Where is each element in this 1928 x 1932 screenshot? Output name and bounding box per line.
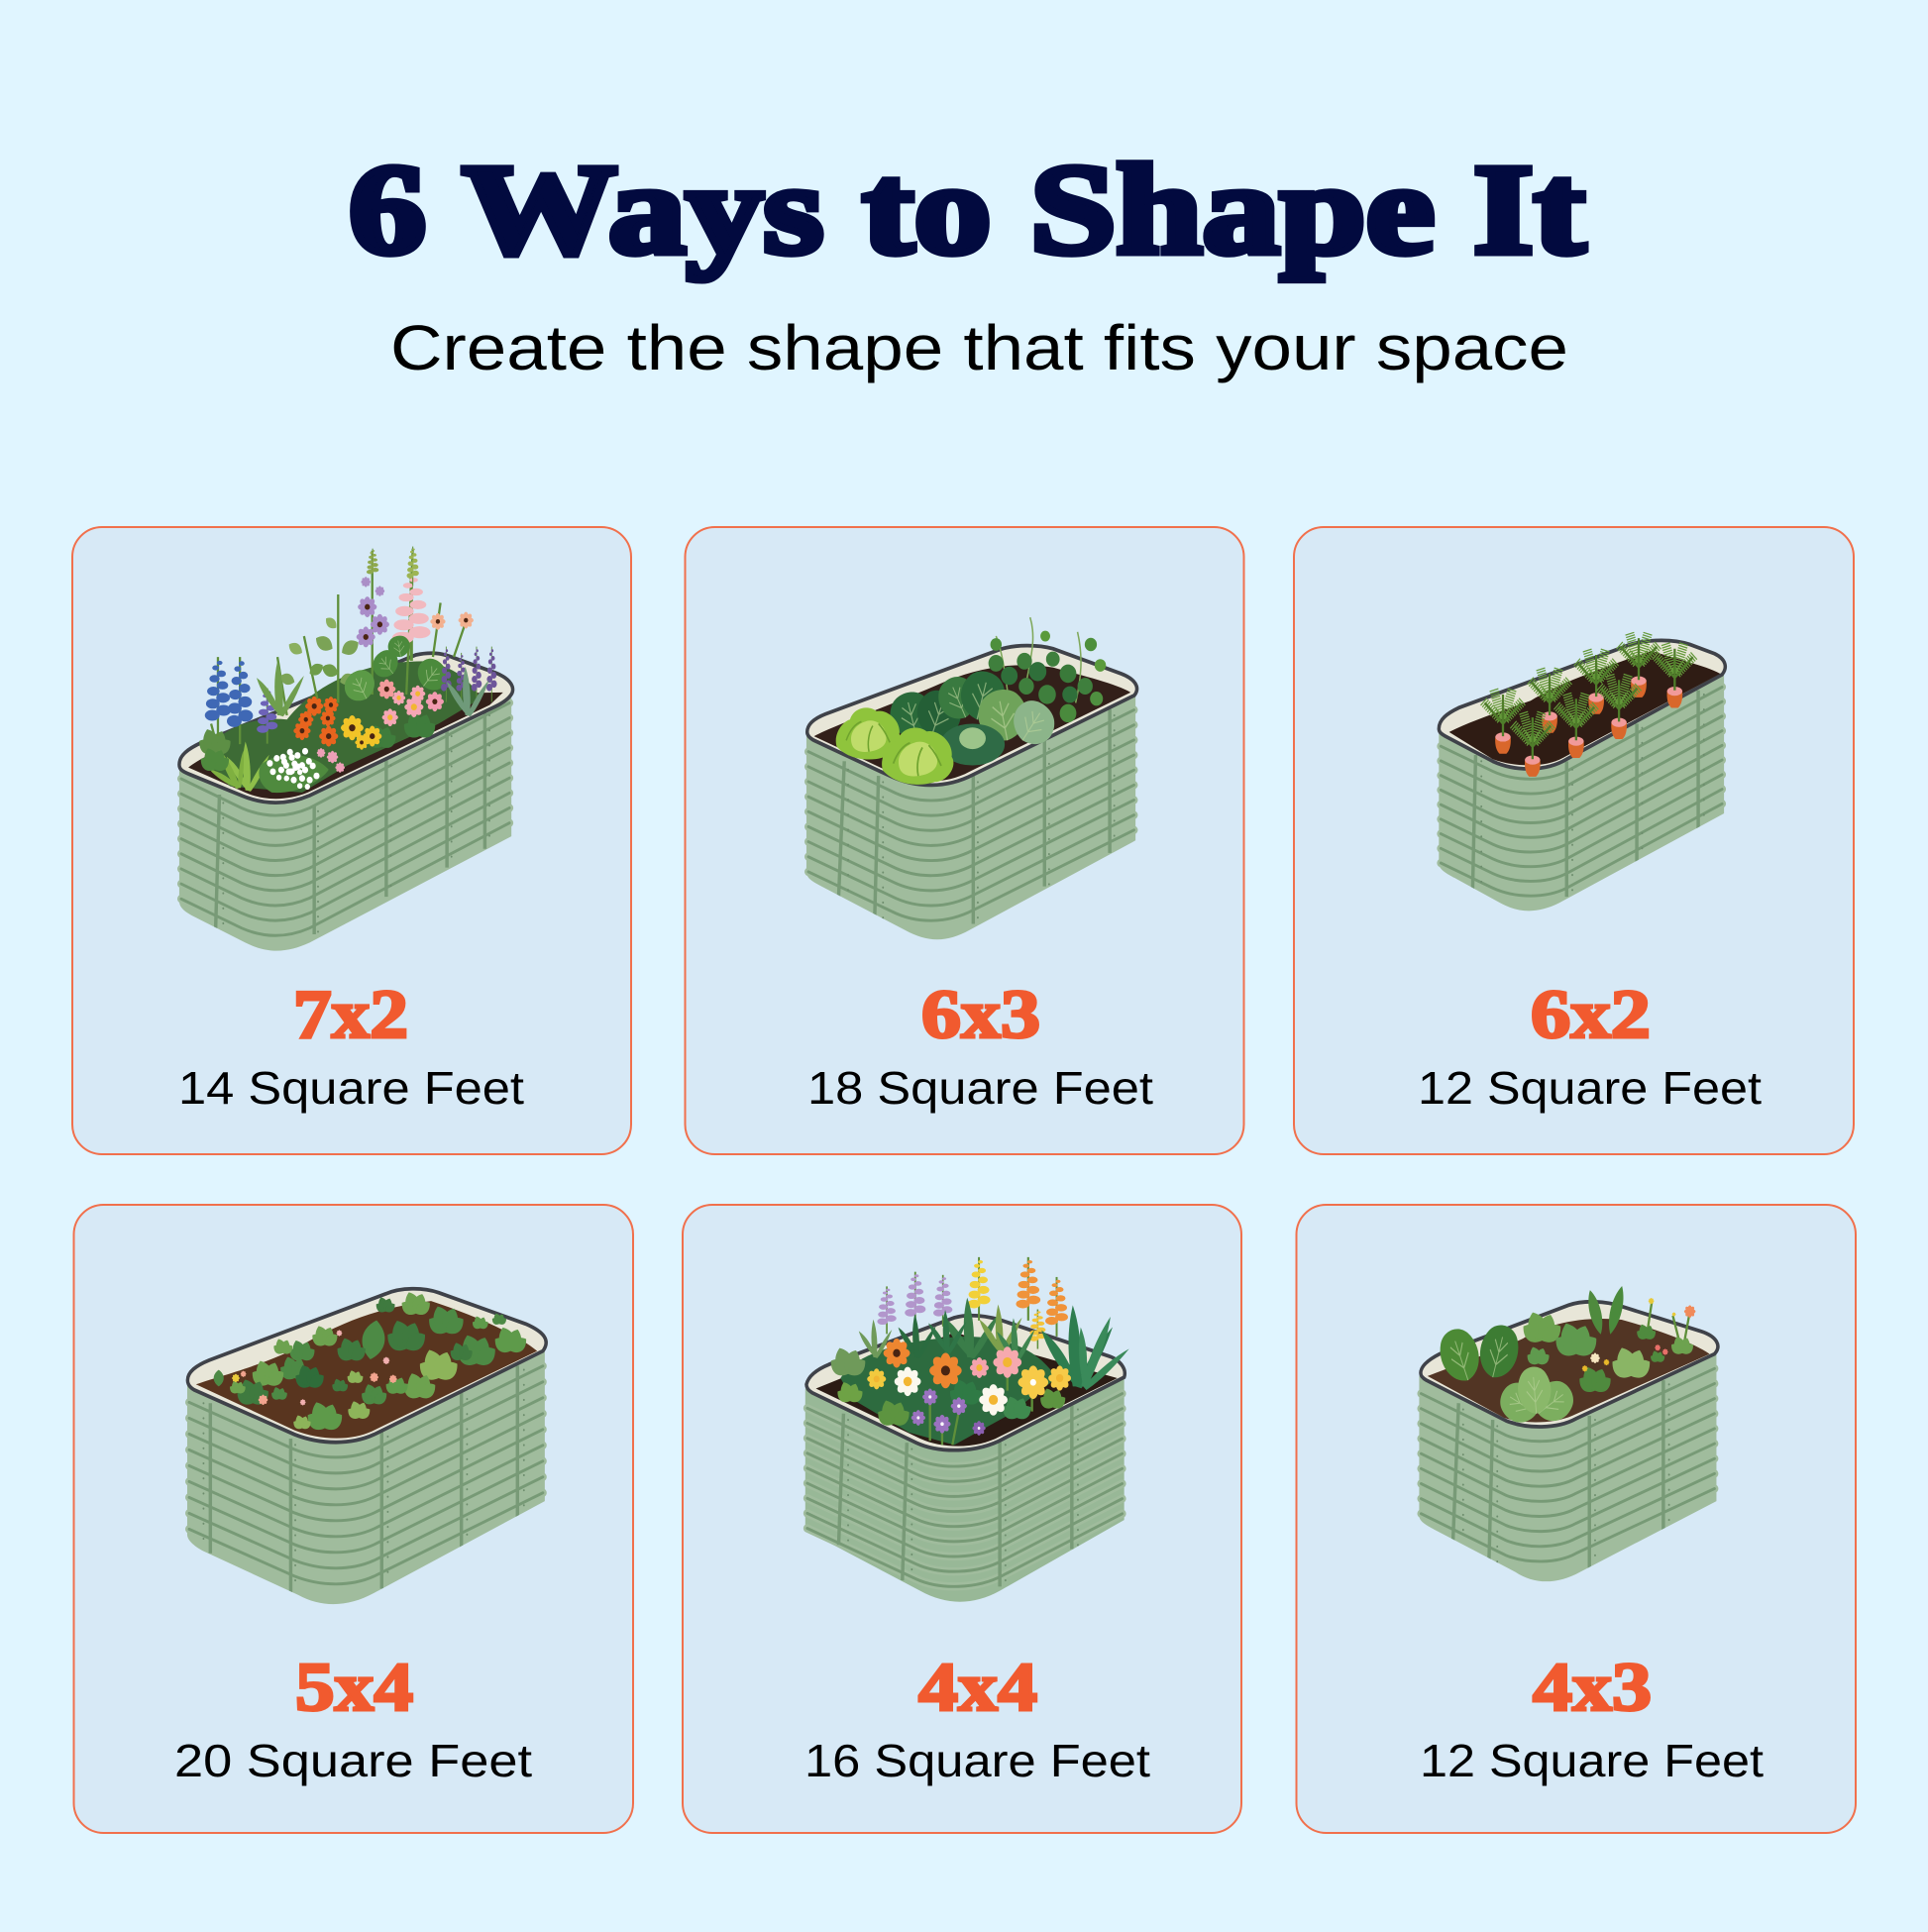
panel: 6x3 raised bed [686, 527, 1244, 1154]
illustration: 5x4 seedling bed [187, 1289, 546, 1604]
area: 14 square feet: 14 Square Feet [178, 1062, 524, 1114]
dimension: 5x4: 5x4 [295, 1650, 413, 1726]
panel: 4x3 raised bed [1296, 1205, 1856, 1833]
area: 16 square feet: 16 Square Feet [804, 1735, 1150, 1786]
dimension: 4x3: 4x3 [1533, 1650, 1652, 1726]
illustration: 6x3 vegetable bed [806, 617, 1137, 939]
dimension: 6x3: 6x3 [921, 977, 1040, 1053]
illustration: 6x2 carrot bed [1439, 633, 1725, 911]
illustration: 4x4 flower bed [805, 1257, 1137, 1602]
panel: 7x2 raised bed [72, 527, 631, 1154]
area: 20 square feet: 20 Square Feet [174, 1735, 532, 1786]
dimension: 6x2: 6x2 [1531, 977, 1651, 1053]
subtitle: Create the shape that fits your space [390, 312, 1568, 383]
area: 12 square feet: 12 Square Feet [1418, 1062, 1762, 1114]
panel: 6x2 raised bed [1294, 527, 1854, 1154]
panel: 5x4 raised bed [73, 1205, 633, 1833]
area: 12 square feet: 12 Square Feet [1420, 1735, 1764, 1786]
title: 6 Ways to Shape It [349, 139, 1585, 281]
area: 18 square feet: 18 Square Feet [807, 1062, 1153, 1114]
dimension: 7x2: 7x2 [293, 977, 408, 1053]
dimension: 4x4: 4x4 [918, 1650, 1037, 1726]
illustration: 7x2 flower bed [179, 547, 513, 951]
panel: 4x4 raised bed [683, 1205, 1241, 1833]
illustration: 4x3 greens bed [1419, 1284, 1718, 1581]
